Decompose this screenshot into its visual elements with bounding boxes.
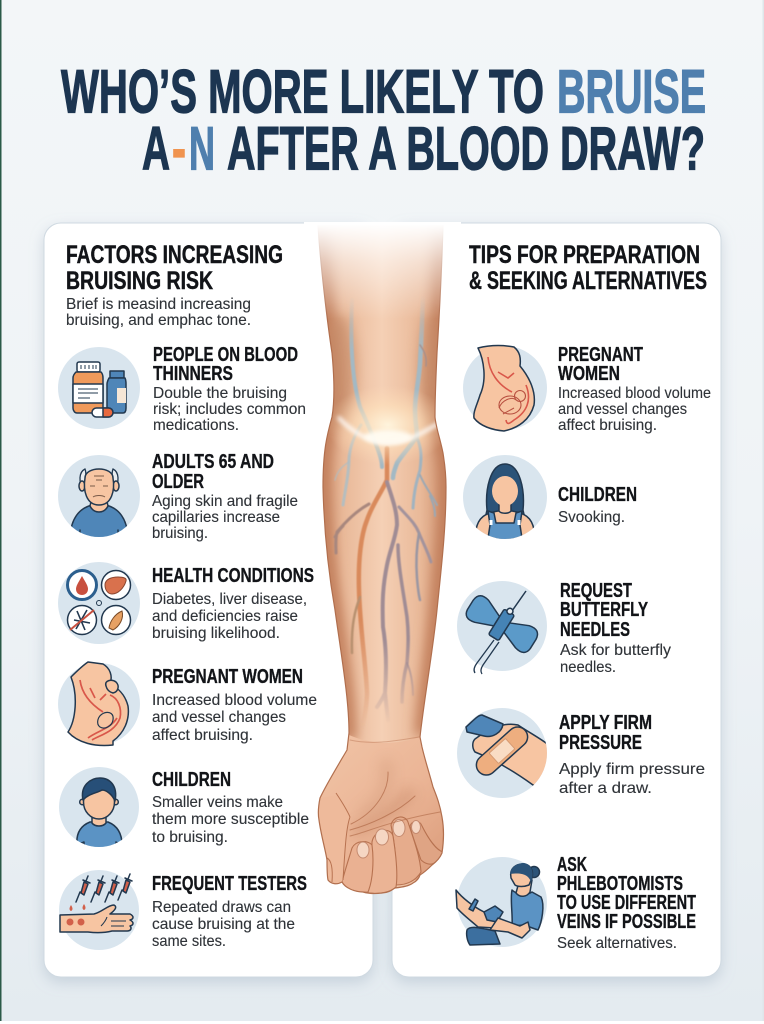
- description: affect bruising.: [152, 727, 253, 744]
- title: N: [189, 114, 215, 182]
- heading: REQUEST: [560, 579, 632, 602]
- section intro text: bruising, and emphac tone.: [66, 312, 251, 329]
- icon: health condition symbols: [58, 562, 140, 644]
- heading: [560, 579, 648, 641]
- description: Seek alternatives.: [557, 935, 677, 952]
- heading: HEALTH CONDITIONS: [152, 564, 314, 587]
- description: [152, 899, 295, 950]
- fingernails: [357, 820, 420, 858]
- item: adults 65 and older: [58, 450, 298, 542]
- thumb: [328, 868, 343, 883]
- item: frequent testers: [59, 870, 307, 950]
- section heading: factors: BRUISING RISK: [66, 267, 213, 295]
- description: Smaller veins make: [152, 794, 283, 811]
- section intro text: Brief is measind increasing: [66, 296, 251, 313]
- description: Increased blood volume: [558, 385, 711, 402]
- item: children (left): [59, 767, 309, 850]
- heading: VEINS IF POSSIBLE: [557, 910, 696, 933]
- description: Increased blood volume: [152, 692, 317, 709]
- heading: [152, 450, 274, 493]
- item: request butterfly needles: [457, 579, 671, 676]
- item: health conditions: [58, 562, 314, 644]
- item: pregnant women (left): [58, 662, 317, 745]
- icon: pregnant body: [58, 662, 140, 745]
- description: [153, 385, 306, 434]
- icon: pregnant body with fetus: [463, 346, 547, 431]
- description: [560, 642, 671, 676]
- description: [558, 385, 711, 434]
- description: and deficiencies raise: [152, 608, 298, 625]
- description: Ask for butterfly: [560, 642, 671, 659]
- heading: PRESSURE: [559, 731, 642, 754]
- illustration: forearm with veins: [310, 224, 452, 894]
- icon: butterfly needle: [457, 581, 547, 674]
- description: capillaries increase: [152, 509, 280, 526]
- item: ask phlebotomists: [456, 853, 696, 952]
- heading: [559, 711, 652, 754]
- item: people on blood thinners: [58, 343, 306, 434]
- heading: PEOPLE ON BLOOD: [153, 343, 298, 366]
- description: same sites.: [152, 933, 226, 950]
- icon: bandage and finger: [457, 708, 550, 798]
- top fade of arm: [310, 224, 452, 319]
- description: [152, 591, 307, 642]
- heading: WOMEN: [558, 362, 620, 385]
- title: A: [142, 114, 170, 182]
- heading: FREQUENT TESTERS: [152, 872, 307, 895]
- heading: PREGNANT WOMEN: [152, 665, 303, 688]
- description: needles.: [560, 659, 616, 676]
- hand: [318, 735, 444, 880]
- heading: CHILDREN: [152, 768, 231, 791]
- heading: APPLY FIRM: [559, 711, 652, 734]
- description: [152, 794, 309, 846]
- icon: phlebotomist with patient: [456, 857, 547, 947]
- icon: syringes and arm: [59, 870, 139, 950]
- description: after a draw.: [559, 780, 652, 797]
- icon: girl: [463, 455, 547, 545]
- elbow glow: [331, 392, 440, 462]
- description: cause bruising at the: [152, 916, 295, 933]
- heading: PREGNANT: [558, 343, 643, 366]
- title: [61, 58, 706, 182]
- panel: tips for preparation and seeking alternatives: [392, 223, 721, 977]
- description: and vessel changes: [152, 709, 286, 726]
- heading: TO USE DIFFERENT: [557, 891, 696, 914]
- section heading: factors: [66, 241, 283, 295]
- heading: [557, 853, 696, 933]
- item: apply firm pressure: [457, 708, 705, 798]
- section heading: factors: FACTORS INCREASING: [66, 241, 283, 269]
- description: Repeated draws can: [152, 899, 291, 916]
- heading: [558, 343, 643, 385]
- heading: CHILDREN: [558, 483, 637, 506]
- heading: [153, 343, 298, 385]
- description: [559, 761, 705, 797]
- heading: PHLEBOTOMISTS: [557, 872, 683, 895]
- description: [152, 493, 298, 542]
- description: Aging skin and fragile: [152, 493, 298, 510]
- heading: NEEDLES: [560, 618, 630, 641]
- section intro text: [66, 296, 251, 329]
- heading: ADULTS 65 AND: [152, 450, 274, 473]
- description: Double the bruising: [153, 385, 287, 402]
- description: them more susceptible: [152, 811, 309, 828]
- description: bruising.: [152, 525, 208, 542]
- fingers: [342, 817, 443, 893]
- item: pregnant women (right): [463, 343, 711, 434]
- description: to bruising.: [152, 829, 228, 846]
- description: [152, 692, 317, 744]
- heading: THINNERS: [153, 362, 233, 385]
- icon: boy: [59, 767, 139, 850]
- veins: [335, 297, 437, 727]
- description: Svooking.: [558, 509, 625, 526]
- icon: older adult: [58, 455, 140, 540]
- section heading: tips: [469, 241, 707, 295]
- description: Diabetes, liver disease,: [152, 591, 307, 608]
- description: Apply firm pressure: [559, 761, 705, 778]
- description: affect bruising.: [558, 417, 657, 434]
- arm outline: [318, 225, 446, 894]
- title: -: [172, 114, 186, 182]
- heading: OLDER: [152, 470, 204, 493]
- section heading: tips: TIPS FOR PREPARATION: [469, 241, 700, 269]
- item: children (right): [463, 455, 637, 545]
- description: and vessel changes: [558, 401, 687, 418]
- heading: ASK: [557, 853, 587, 876]
- panel: factors increasing bruising risk: [44, 223, 373, 977]
- description: risk; includes common: [153, 401, 306, 418]
- description: medications.: [153, 417, 239, 434]
- description: bruising likelihood.: [152, 625, 280, 642]
- heading: BUTTERFLY: [560, 598, 648, 621]
- icon: medicine bottles: [58, 347, 140, 429]
